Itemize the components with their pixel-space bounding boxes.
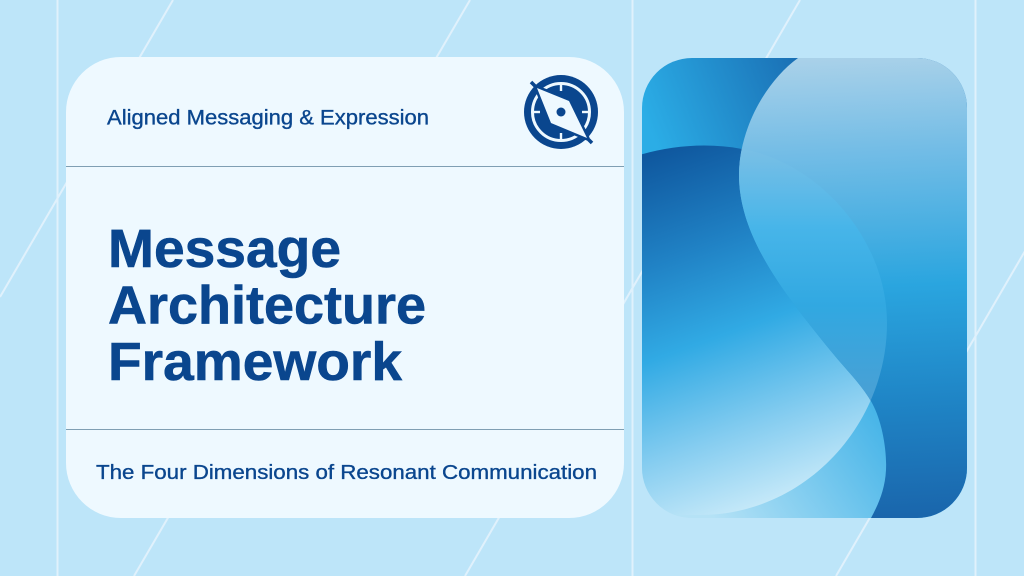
title: Framework	[108, 332, 403, 392]
title: Architecture	[108, 276, 426, 336]
title: Message	[108, 219, 341, 279]
panel: abstract gradient S-curve artwork	[630, 58, 967, 530]
bottom divider	[66, 428, 624, 430]
icon: compass	[524, 75, 598, 149]
subtitle: The Four Dimensions of Resonant Communication	[96, 462, 597, 484]
panel: title card	[66, 57, 624, 518]
lower light band	[710, 400, 967, 518]
top divider	[66, 166, 624, 168]
title	[108, 219, 426, 392]
right S-curve layer	[739, 58, 967, 518]
overlap lens	[739, 149, 887, 400]
eyebrow text: Aligned Messaging & Expression	[107, 106, 429, 130]
left dome	[642, 146, 870, 514]
top-left base	[642, 58, 967, 154]
